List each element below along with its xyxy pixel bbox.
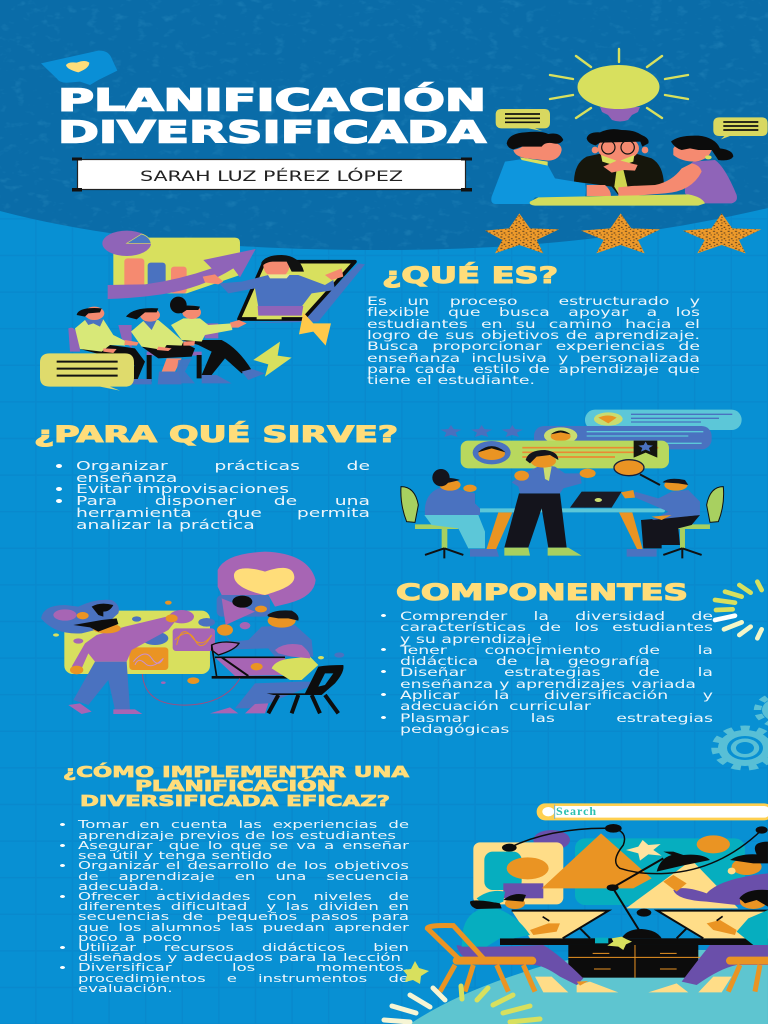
desk lamp and wires [502,824,768,932]
text block: para qué sirve: enseñanza [76,470,177,485]
text block: componentes: Aplicar la diversificación y [400,688,713,702]
illustration: para qué sirve [401,410,742,558]
illustration: componentes [41,552,344,714]
right person [618,136,737,203]
author name box [72,158,472,192]
heading: cómo implementar: PLANIFICACIÓN [135,776,336,795]
text block: cómo implementar: secuencias de pequeños pasos para [78,910,409,923]
title: PLANIFICACIÓN [58,82,486,118]
text block: componentes: Plasmar las estrategias [400,711,713,725]
illustration: qué es [40,231,365,391]
rating stars [485,213,761,253]
text block: qué es: Es un proceso estructurado y [367,294,700,308]
text block: cómo implementar: Utilizar recursos didácticos bien [78,941,409,954]
text block: qué es: estudiantes en su camino hacia el [367,317,700,331]
standing woman [68,614,178,714]
text block: para qué sirve: Evitar improvisaciones [76,481,289,496]
text block: qué es: logro de sus objetivos de aprendizaje. [367,328,700,342]
text block: cómo implementar: Asegurar que lo que se va a enseñar [78,839,409,852]
text block: componentes: Diseñar estrategias de la [400,665,713,679]
small dots and cord [53,601,344,705]
text block: cómo implementar: diferentes dificultad y las dividen en [78,900,409,913]
seated man [621,479,724,558]
table and laptop [467,492,665,552]
search bar [538,804,768,819]
speech bubble left [496,109,550,131]
text block: qué es: para cada estilo de aprendizaje que [367,362,700,376]
audience [68,297,265,384]
title [58,82,487,150]
decorative gears [715,695,768,768]
speech bubble lines [40,353,134,391]
heading: componentes: COMPONENTES [396,581,688,606]
text block: qué es: flexible que busca apoyar a los [367,305,700,319]
seated woman [401,469,499,558]
text block: cómo implementar: poco a poco [78,931,182,944]
decorative sunburst rays bottom [384,986,540,1022]
text block: para qué sirve [56,458,370,532]
text block: para qué sirve: herramienta que permita [76,505,370,520]
text block: componentes: características de los estudiantes [400,620,713,634]
header band [0,0,768,250]
text block: componentes: didáctica de la geografía [400,654,650,668]
heading: para qué sirve: ¿PARA QUÉ SIRVE? [34,422,398,448]
decorative sunburst rays right [715,582,762,638]
text block: para qué sirve: analizar la práctica [76,517,255,532]
text block: qué es: Busca proporcionar experiencias de [367,339,700,353]
heading: cómo implementar [63,762,410,810]
seated woman and chair [210,644,344,713]
text block: qué es: tiene el estudiante. [367,373,535,387]
text block: componentes: Comprender la diversidad de [400,609,713,623]
text block: cómo implementar: procedimientos e instrumentos de [78,972,409,985]
idea board [64,610,215,674]
star over text [403,961,429,984]
chair left [427,926,535,992]
teacher [203,255,343,316]
heading: cómo implementar: DIVERSIFICADA EFICAZ? [80,792,390,810]
small image card [217,595,270,629]
illustration: three people at table [491,109,768,206]
small stars [440,425,523,437]
left seated person [457,891,618,992]
text block: cómo implementar: Ofrecer actividades con niveles de [78,890,409,903]
drawing desk [212,642,292,677]
heart speech bubble [218,552,316,607]
text block: qué es [367,294,700,387]
illustration: team at drafting tables [410,804,768,1024]
world blob [41,600,119,633]
icon: heart bubble [41,51,117,85]
text block: componentes [381,609,713,736]
text block: componentes: y su aprendizaje [400,632,542,646]
author name box: SARAH LUZ PÉREZ LÓPEZ [140,167,403,185]
center panel [542,833,745,908]
speech bubble right [713,117,768,139]
text block: componentes: enseñanza y aprendizajes variada [400,677,696,691]
text block: componentes: Tener conocimiento de la [400,643,713,657]
text block: cómo implementar: evaluación. [78,982,173,995]
lightning bolts [299,312,331,346]
standing man [504,450,596,556]
heading: cómo implementar: ¿CÓMO IMPLEMENTAR UNA [63,762,410,781]
left person [491,132,611,204]
left panel [473,830,570,904]
chart panel [102,231,240,293]
heading: qué es: ¿QUÉ ES? [382,263,558,289]
text block: cómo implementar: Tomar en cuenta las experiencias de [78,818,409,831]
text block: componentes: adecuación curricular [400,699,591,713]
review cards [461,410,742,468]
text block: cómo implementar: aprendizaje previos de los estudiantes [78,829,396,842]
text block: cómo implementar: Diversificar los momentos, [78,961,409,974]
text block: para qué sirve: Para disponer de una [76,493,370,508]
growth arrow [108,249,256,299]
search bar: Search [556,804,597,818]
text block: cómo implementar: diseñados y adecuados para la lección [78,951,401,964]
seated man [217,610,313,657]
drafting tables [512,911,768,938]
text block: cómo implementar: sea útil y tenga sentido [78,849,272,862]
text block: cómo implementar: que los alumnos las puedan aprender [78,921,409,934]
magnifier [614,460,660,485]
desk [500,929,768,978]
text block: qué es: enseñanza inclusiva y personalizada [367,351,700,365]
table [530,194,705,206]
right seated people [648,842,768,992]
tablet [239,262,365,323]
center person [574,129,664,195]
text block: cómo implementar: Organizar el desarrollo de los objetivos [78,859,409,872]
teal hill [410,950,768,1024]
text block: componentes: pedagógicas [400,722,509,736]
icon: light bulb [550,49,688,122]
text block: cómo implementar: de aprendizaje en una secuencia [78,870,409,883]
text block: cómo implementar: adecuada. [78,880,164,893]
text block: para qué sirve: Organizar prácticas de [76,458,370,473]
title: DIVERSIFICADA [58,116,487,150]
